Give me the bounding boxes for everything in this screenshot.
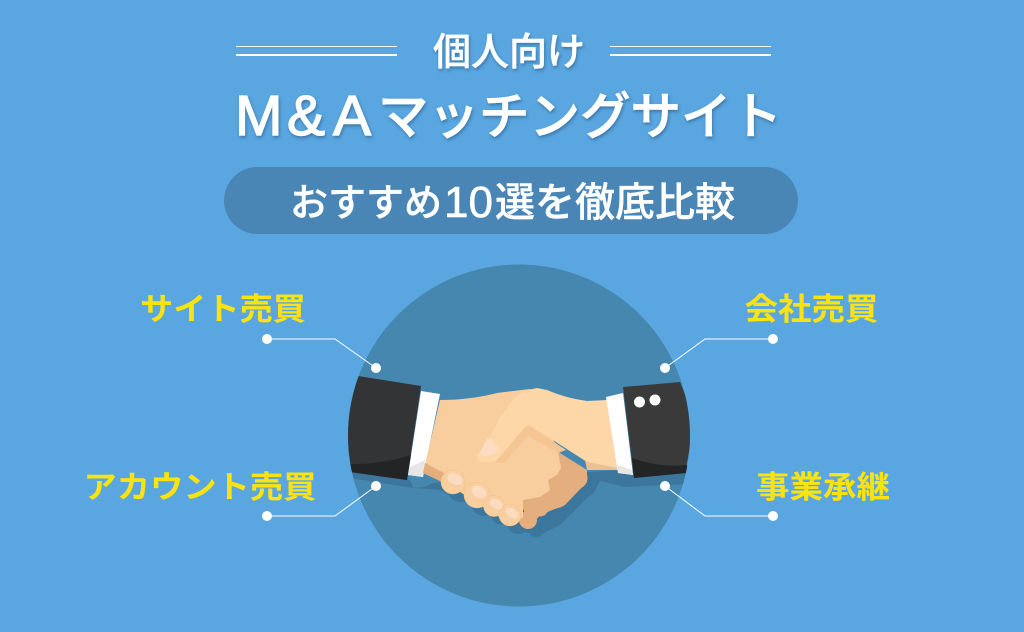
label: サイト売買: サイト売買 xyxy=(140,292,306,327)
subtitle pill: 選を徹底比較 xyxy=(495,181,735,225)
left sleeve shade xyxy=(350,455,411,480)
right forearm lower shade xyxy=(585,460,618,470)
title: M&A xyxy=(235,84,371,148)
label: 会社売買 xyxy=(660,292,878,373)
left sleeve xyxy=(340,376,421,480)
thumb nail xyxy=(478,438,498,456)
label: 事業承継: 事業承継 xyxy=(756,470,890,505)
crease under right hand xyxy=(495,424,566,463)
sleeve buttons xyxy=(634,394,660,408)
right cuff shade xyxy=(618,465,633,475)
label: 事業承継 xyxy=(660,470,890,521)
title: マッチングサイト xyxy=(378,88,782,145)
left cuff shade xyxy=(408,460,425,477)
front fingers xyxy=(441,470,521,526)
label: アカウント売買: アカウント売買 xyxy=(84,470,316,505)
finger nails xyxy=(448,473,518,518)
right sleeve xyxy=(623,382,695,478)
label: アカウント売買 xyxy=(84,470,381,521)
circle backdrop xyxy=(348,264,690,606)
lower wrist shade xyxy=(423,463,444,482)
right cuff xyxy=(606,393,633,475)
handshake illustration xyxy=(340,376,695,537)
hand shadow xyxy=(345,470,690,537)
label: サイト売買 xyxy=(140,292,381,373)
right hand xyxy=(477,388,618,468)
heading: 個人向け with double rules: 個人向け xyxy=(433,32,585,74)
label: 会社売買: 会社売買 xyxy=(744,292,878,327)
right hand back fingers xyxy=(519,448,588,529)
left cuff xyxy=(408,391,440,477)
right sleeve shade xyxy=(632,458,687,478)
subtitle pill xyxy=(224,167,798,234)
subtitle pill: おすすめ xyxy=(290,183,442,225)
left hand xyxy=(423,389,561,525)
subtitle pill: 10 xyxy=(444,178,493,227)
